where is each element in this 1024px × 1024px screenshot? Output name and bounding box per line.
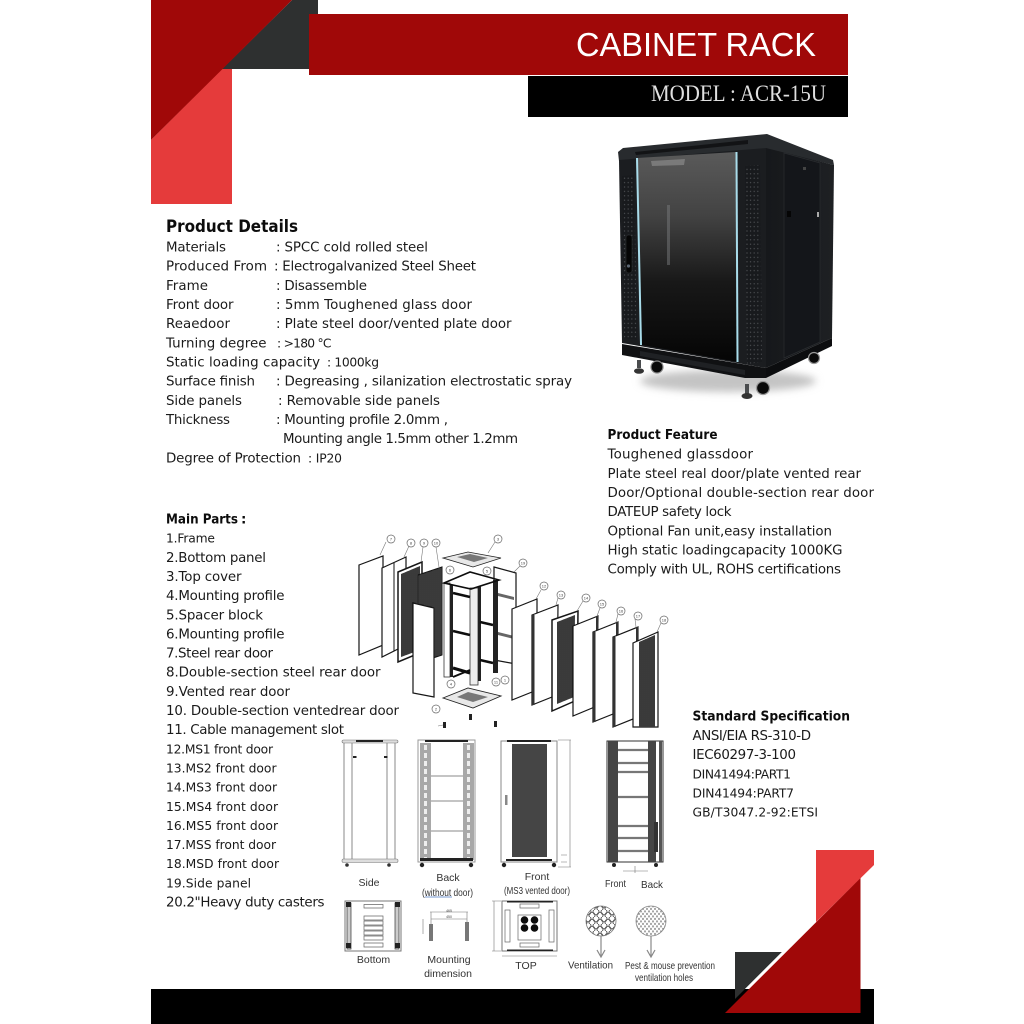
text block: product details list: : SPCC cold rolled steel xyxy=(276,241,428,256)
heading: main parts: Main Parts xyxy=(166,512,238,528)
text block: product details list: : 5mm Toughened glass door xyxy=(276,298,472,313)
drawing: top view: TOP xyxy=(515,960,537,972)
text block: main parts list: 6.Mounting profile xyxy=(166,627,284,642)
title banner: CABINET RACK xyxy=(576,26,816,63)
text block: product details list: Turning degree xyxy=(165,336,266,351)
heading: product feature: Product Feature xyxy=(608,427,718,443)
text block: main parts list: 19.Side panel xyxy=(166,876,251,890)
text block: main parts list: 7.Steel rear door xyxy=(166,647,273,662)
product photo: black cabinet rack xyxy=(618,134,834,399)
drawing: back view without door: Back xyxy=(436,872,460,884)
icon: pest and mouse prevention ventilation holes: Pest & mouse prevention xyxy=(625,960,715,972)
drawing: mounting dimension: Mounting xyxy=(427,954,471,966)
drawing: bottom view: Bottom xyxy=(357,954,390,966)
decoration: bottom-right corner shapes xyxy=(725,850,874,1013)
text block: product details list: Reaedoor xyxy=(166,317,230,332)
text block: main parts list: 3.Top cover xyxy=(166,570,242,585)
drawing: front and back frame view: Front xyxy=(605,878,626,890)
exploded view diagram of cabinet parts xyxy=(359,535,668,728)
text block: product details list: Side panels xyxy=(166,394,242,409)
drawing: front view with vented door: (MS3 vented door) xyxy=(504,885,570,897)
text block: product details list: : Plate steel door/vented plate door xyxy=(276,317,512,332)
text block: product details list: Surface finish xyxy=(166,375,255,390)
text block: main parts list: 15.MS4 front door xyxy=(166,800,279,814)
drawing: mounting dimension: dimension xyxy=(424,968,472,980)
text block: product details list: : >180 °C xyxy=(277,336,332,350)
exploded view diagram of cabinet parts: 3 xyxy=(497,536,500,542)
footer bar xyxy=(151,989,874,1024)
text block: product details list: : Disassemble xyxy=(276,279,367,294)
text block: main parts list: 14.MS3 front door xyxy=(166,781,278,795)
text block: product details list: Mounting angle 1.5mm other 1.2mm xyxy=(283,432,518,447)
text block: product details list: : 1000kg xyxy=(327,356,379,370)
heading: main parts: : xyxy=(241,512,246,528)
exploded view diagram of cabinet parts: 16 xyxy=(619,608,624,614)
exploded view diagram of cabinet parts: 11 xyxy=(494,680,499,684)
text block: product feature list: High static loadingcapacity 1000KG xyxy=(608,544,842,558)
text block: product feature list: Toughened glassdoor xyxy=(606,448,753,463)
drawing: front and back frame view xyxy=(605,741,664,891)
text block: product details list: : IP20 xyxy=(308,451,342,465)
exploded view diagram of cabinet parts: 4 xyxy=(450,682,453,686)
text block: standard specification list: DIN41494:PART1 xyxy=(692,767,791,781)
exploded view diagram of cabinet parts: 18 xyxy=(662,618,667,622)
text block: main parts list: 17.MSS front door xyxy=(166,838,277,852)
text block: product details list: : Electrogalvanized Steel Sheet xyxy=(274,260,476,275)
text block: product details list: Frame xyxy=(166,279,208,294)
exploded view diagram of cabinet parts: 10 xyxy=(434,540,439,546)
drawing: side view: Side xyxy=(358,877,380,889)
text block: product feature list xyxy=(606,448,874,578)
text block: product details list: Degree of Protection xyxy=(166,451,301,466)
text block: product feature list: DATEUP safety lock xyxy=(608,505,732,520)
drawing: mounting dimension: 450 xyxy=(446,915,452,919)
text block: main parts list: 13.MS2 front door xyxy=(166,762,277,776)
drawing: back view without door: (without door) xyxy=(422,887,473,899)
text block: standard specification list xyxy=(692,729,818,820)
icon: ventilation holes: Ventilation xyxy=(568,960,613,972)
text block: product details list: : Degreasing , silanization electrostatic spray xyxy=(276,375,572,390)
drawing: front view with vented door: Front xyxy=(525,871,549,883)
icon: ventilation holes xyxy=(568,906,616,972)
text block: main parts list: 8.Double-section steel rear door xyxy=(166,666,381,681)
text block: product feature list: Plate steel real door/plate vented rear xyxy=(608,467,861,482)
drawing: top view xyxy=(492,901,557,972)
exploded view diagram of cabinet parts: 5 xyxy=(486,568,489,574)
text block: main parts list: 10. Double-section ventedrear door xyxy=(166,704,399,719)
icon: pest and mouse prevention ventilation holes: ventilation holes xyxy=(635,972,693,984)
drawing: bottom view xyxy=(345,901,401,966)
text block: main parts list: 18.MSD front door xyxy=(166,857,280,871)
decoration: top-left corner shapes xyxy=(151,0,318,204)
text block: main parts list: 16.MS5 front door xyxy=(166,819,279,833)
text block: product details list xyxy=(165,241,572,466)
text block: product details list: Static loading capacity xyxy=(166,356,320,370)
text block: main parts list xyxy=(166,532,399,910)
heading: product details: Product Details xyxy=(166,217,298,236)
drawing: back view without door xyxy=(418,740,475,899)
exploded view diagram of cabinet parts: 9 xyxy=(423,540,426,546)
text block: product details list: Produced From xyxy=(166,260,267,275)
drawing: side view xyxy=(342,740,398,889)
exploded view diagram of cabinet parts: 15 xyxy=(600,602,605,606)
text block: main parts list: 11. Cable management slot xyxy=(166,723,344,738)
text block: main parts list: 5.Spacer block xyxy=(166,608,263,623)
exploded view diagram of cabinet parts: 12 xyxy=(542,584,547,588)
text block: product details list: : Removable side panels xyxy=(278,394,440,409)
text block: product details list: Front door xyxy=(166,298,234,313)
text block: main parts list: 20.2"Heavy duty casters xyxy=(166,896,325,910)
text block: product feature list: Optional Fan unit,easy installation xyxy=(608,524,832,539)
text block: product feature list: Comply with UL, ROHS certifications xyxy=(608,563,841,578)
exploded view diagram of cabinet parts: 19 xyxy=(521,560,526,566)
text block: main parts list: 1.Frame xyxy=(166,532,215,546)
drawing: front and back frame view: Back xyxy=(641,879,664,891)
text block: product details list: : Mounting profile 2.0mm , xyxy=(276,413,448,428)
text block: product details list: Materials xyxy=(166,241,226,256)
text block: main parts list: 9.Vented rear door xyxy=(166,685,290,700)
exploded view diagram of cabinet parts: 13 xyxy=(559,592,564,598)
text block: main parts list: 2.Bottom panel xyxy=(166,551,266,566)
exploded view diagram of cabinet parts: 1 xyxy=(504,678,507,682)
exploded view diagram of cabinet parts: 7 xyxy=(390,536,393,542)
text block: standard specification list: ANSI/EIA RS-310-D xyxy=(692,729,811,744)
icon: pest and mouse prevention ventilation holes xyxy=(625,906,715,984)
exploded view diagram of cabinet parts: 14 xyxy=(584,596,589,600)
text block: standard specification list: DIN41494:PART7 xyxy=(692,786,794,800)
heading: standard specification: Standard Specification xyxy=(692,708,850,724)
exploded view diagram of cabinet parts: 8 xyxy=(410,540,413,546)
text block: main parts list: 4.Mounting profile xyxy=(166,589,284,604)
text block: product feature list: Door/Optional double-section rear door xyxy=(608,486,874,501)
model banner xyxy=(528,76,848,117)
text block: standard specification list: IEC60297-3-100 xyxy=(692,748,796,763)
exploded view diagram of cabinet parts: 2 xyxy=(435,706,438,712)
text block: product details list: Thickness xyxy=(165,413,230,428)
drawing: mounting dimension: 465 xyxy=(446,909,452,913)
text block: main parts list: 12.MS1 front door xyxy=(166,742,274,756)
exploded view diagram of cabinet parts: 6 xyxy=(449,568,452,572)
exploded view diagram of cabinet parts: 17 xyxy=(636,614,641,618)
model banner: MODEL : ACR-15U xyxy=(651,81,826,107)
text block: standard specification list: GB/T3047.2-92:ETSI xyxy=(692,806,818,820)
drawing: front view with vented door xyxy=(501,740,571,897)
title banner xyxy=(309,14,848,75)
drawing: mounting dimension xyxy=(423,909,472,980)
